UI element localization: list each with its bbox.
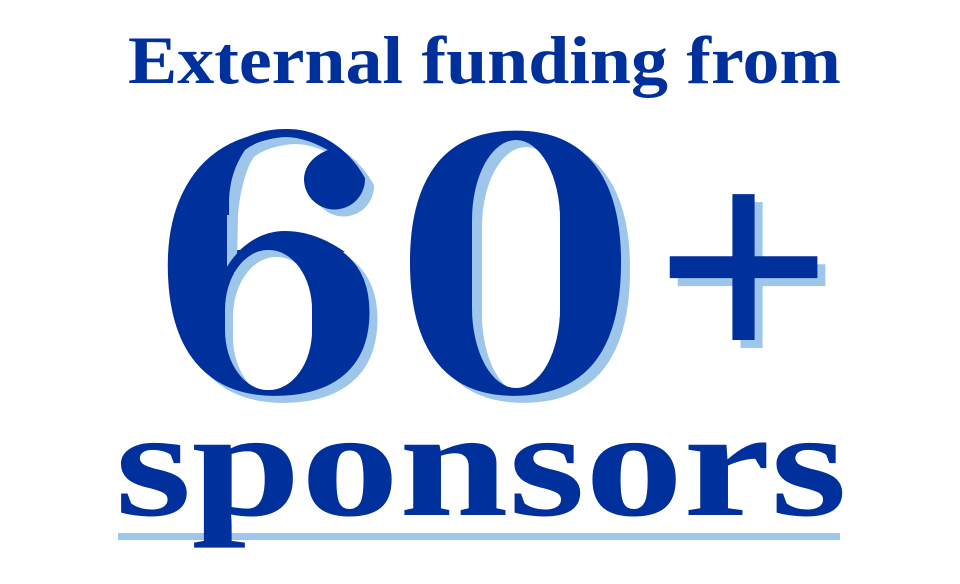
lower counter of the 6 [225,250,312,390]
ball terminal of the 6 [205,129,374,222]
big number shadow: 60+ [160,50,842,485]
big number: 60+: 0 [391,43,640,478]
big number shadow: 60+: 0 [400,50,649,485]
big number shadow: 60+: 6 [160,50,391,485]
underline [118,533,840,540]
counter of the 0 [472,140,560,388]
big number: 60+: 6 [152,43,383,478]
big number: 60+: + [653,92,834,439]
heading: External funding from: External funding from [128,22,841,98]
big number: 60+ [152,43,834,478]
upper counter of the 6 [227,133,360,272]
infographic: external funding from 60+ sponsors [118,35,842,548]
big number shadow: 60+: + [661,100,842,447]
label: sponsors: sponsors [115,380,847,549]
